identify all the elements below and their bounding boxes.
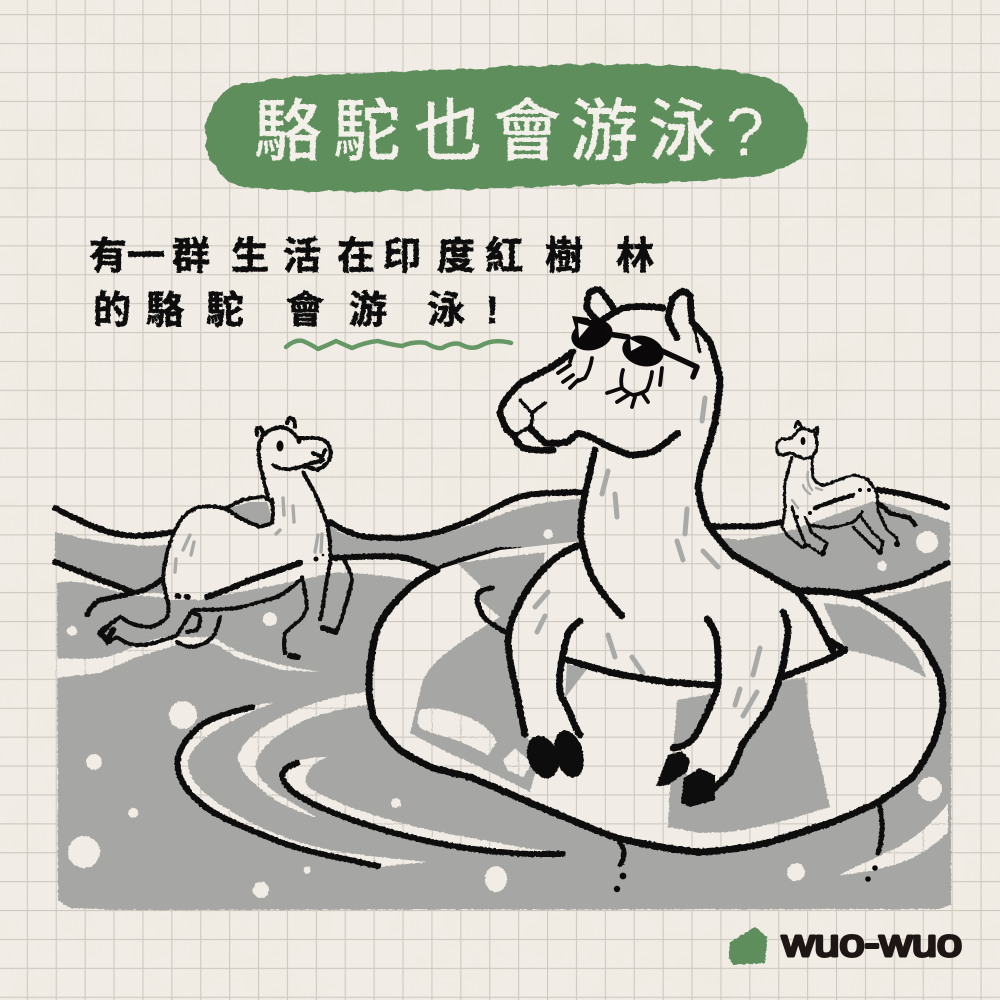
water and background shapes xyxy=(55,490,951,910)
right small camel xyxy=(777,421,915,556)
ring shadow left xyxy=(410,552,545,792)
ring highlight diamond xyxy=(503,748,532,777)
ring shadow small xyxy=(565,664,587,698)
grey water main xyxy=(57,573,951,910)
ring shadow right xyxy=(823,603,927,678)
camel fill xyxy=(163,427,332,600)
left camel xyxy=(87,418,352,657)
small camel outline xyxy=(777,421,898,555)
ring highlight blob xyxy=(418,708,497,755)
intro line 1: 有一群生活在印度紅樹林 xyxy=(89,236,654,278)
small camel fill xyxy=(777,428,878,530)
small camel line and tail xyxy=(815,495,915,525)
ring body xyxy=(369,540,943,852)
ring shadow centre xyxy=(668,677,830,833)
brand name: wuo-wuo xyxy=(781,923,962,965)
small camel shading xyxy=(792,472,822,508)
llama shading marks xyxy=(535,398,760,716)
ripple middle highlight xyxy=(238,692,368,818)
swim ring xyxy=(369,540,943,892)
title text: 駱駝也會游泳? xyxy=(254,94,764,170)
llama hooves xyxy=(521,727,715,807)
ring outline xyxy=(369,570,943,852)
grey water right xyxy=(710,500,950,593)
pale wave xyxy=(55,637,320,678)
grey water band upper xyxy=(55,498,590,595)
closed eyes and lashes xyxy=(558,352,662,407)
llama outline xyxy=(500,290,845,792)
sunglasses xyxy=(568,315,697,377)
ripple outer highlight xyxy=(176,703,427,867)
small camel details xyxy=(795,437,900,556)
intro text xyxy=(89,236,654,349)
ring dots xyxy=(614,865,878,892)
ripple bottom right highlight xyxy=(840,803,948,875)
llama nose xyxy=(515,400,545,435)
bubbles xyxy=(67,529,942,898)
brand logo xyxy=(729,923,962,965)
main llama xyxy=(500,290,845,807)
title banner xyxy=(205,64,807,191)
camel water line and tail xyxy=(87,563,336,657)
llama body fill xyxy=(500,291,833,792)
title pill xyxy=(205,64,807,191)
left lens xyxy=(568,315,616,355)
camel outline xyxy=(100,418,352,653)
camel shading xyxy=(175,498,322,572)
wavy green underline xyxy=(286,341,511,349)
right lens xyxy=(619,331,667,371)
ring hook and drips xyxy=(477,588,882,865)
water outlines xyxy=(55,490,948,866)
house icon xyxy=(729,927,767,965)
intro line 2: 的駱駝會游泳! xyxy=(93,290,499,332)
ripple inner highlight xyxy=(284,757,565,854)
camel eyes xyxy=(276,436,324,562)
grey behind hump xyxy=(230,502,274,528)
